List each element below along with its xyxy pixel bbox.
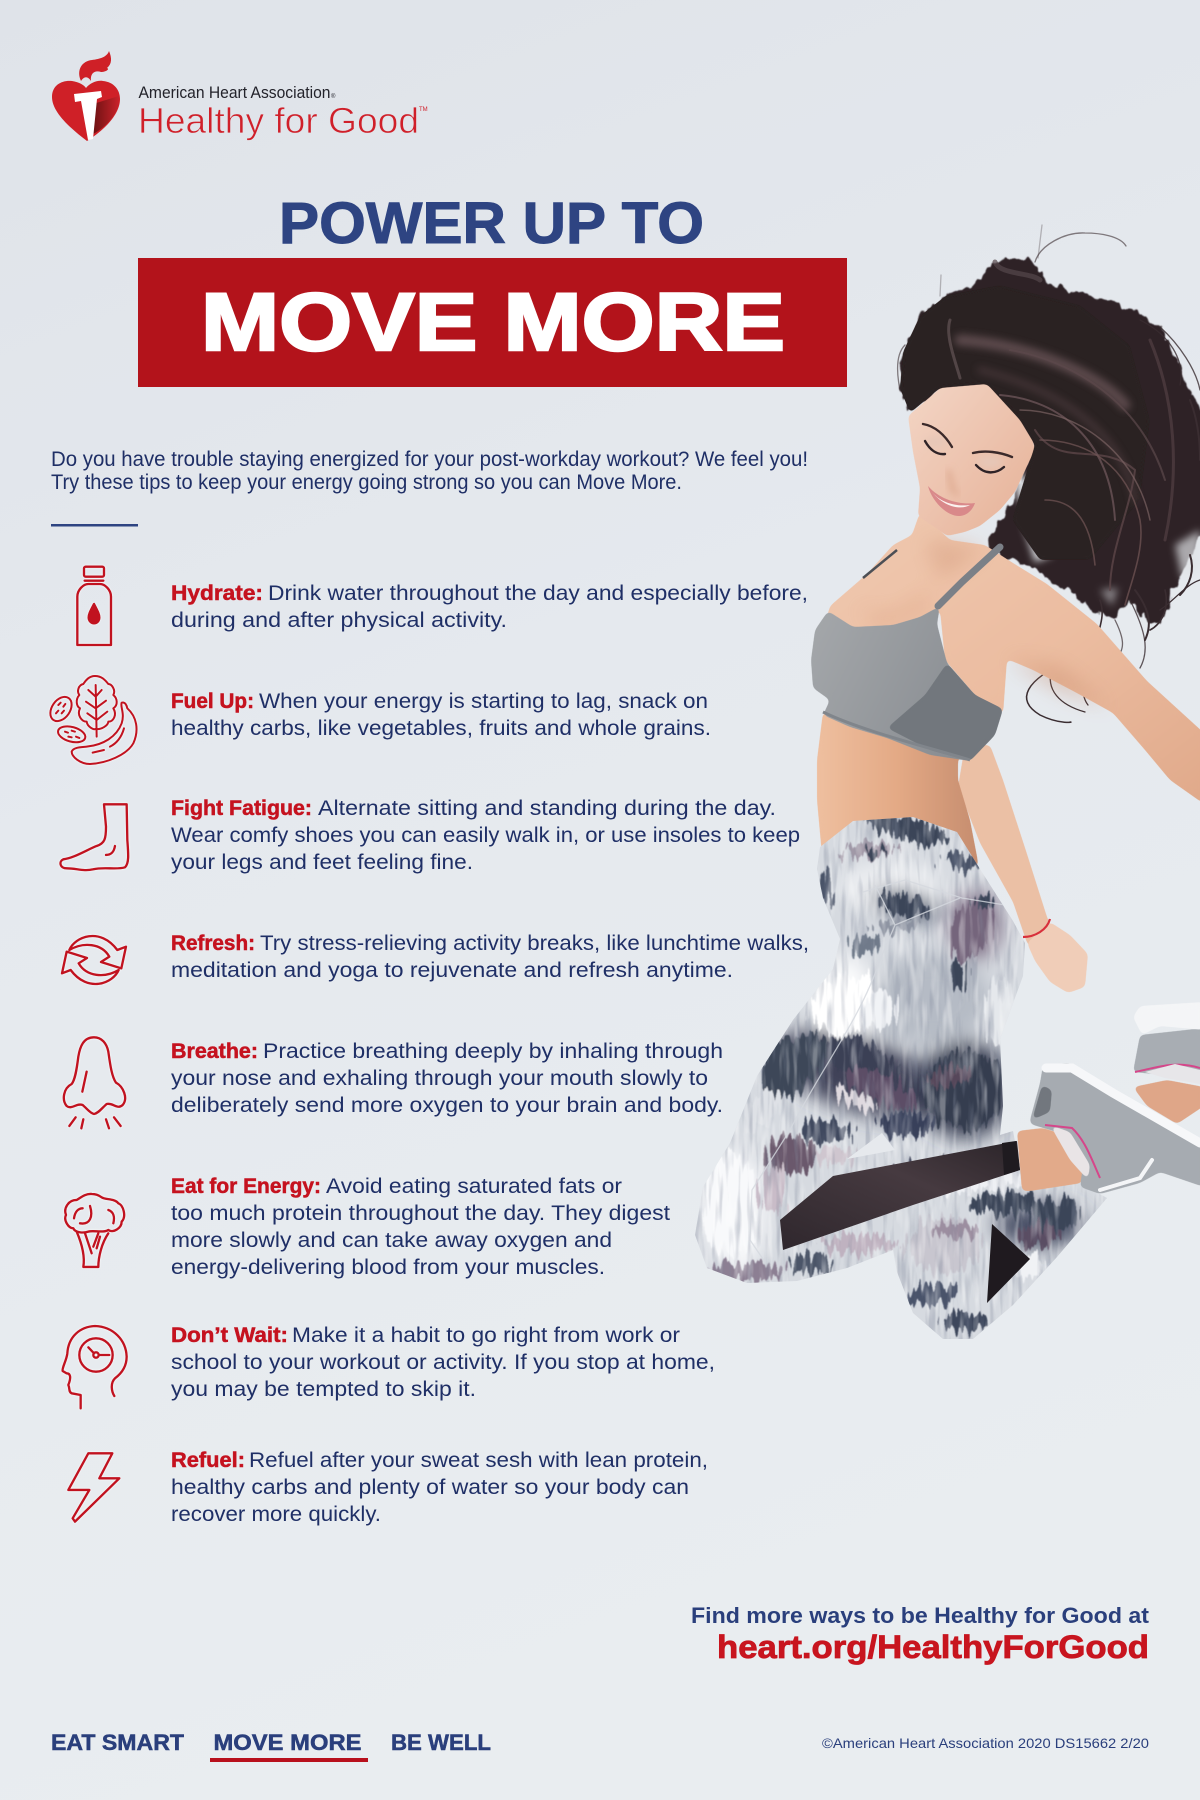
background gap between legs xyxy=(847,1133,895,1159)
tip: Hydrate xyxy=(77,567,808,645)
bra base xyxy=(811,606,1003,761)
text: healthy carbs, like vegetables, fruits and whole grains. xyxy=(171,717,711,740)
tip: Don't Wait xyxy=(63,1324,715,1408)
text: Eat for Energy: xyxy=(171,1175,321,1198)
banner: Move More xyxy=(138,258,847,387)
text: Hydrate: xyxy=(171,582,263,605)
icon: refresh arrows xyxy=(62,936,126,984)
icon: water bottle xyxy=(77,567,111,645)
sports bra xyxy=(811,547,1003,761)
icon: leaf, almonds, banana xyxy=(46,676,137,764)
text xyxy=(171,582,808,632)
face xyxy=(908,380,1035,536)
wrist band xyxy=(1023,919,1050,937)
hair flyaway strands xyxy=(898,225,1200,722)
text: Make it a habit to go right from work or xyxy=(292,1324,680,1347)
text xyxy=(171,932,809,982)
eye shadow xyxy=(925,436,1003,468)
mesh band xyxy=(1002,1141,1020,1175)
icon: broccoli xyxy=(65,1194,124,1267)
text: healthy carbs and plenty of water so your body can xyxy=(171,1476,689,1499)
registered mark: ® xyxy=(331,93,336,100)
hair back xyxy=(900,258,1200,625)
banner: Move More: MOVE MORE xyxy=(201,277,785,368)
right eye xyxy=(976,465,1004,472)
footer navigation xyxy=(51,1730,491,1762)
text: Drink water throughout the day and especially before, xyxy=(268,582,808,605)
left eye xyxy=(925,441,945,454)
back shoe trim xyxy=(1135,1065,1200,1072)
call to action: heart.org/HealthyForGood xyxy=(717,1629,1149,1665)
shoe sole xyxy=(1046,1068,1200,1143)
text: deliberately send more oxygen to your brain and body. xyxy=(171,1094,723,1117)
leggings seam xyxy=(750,880,1005,1262)
tip: Refresh xyxy=(62,932,809,984)
brand name: American Heart Association xyxy=(138,84,330,102)
text xyxy=(171,690,711,740)
text: meditation and yoga to rejuvenate and refresh anytime. xyxy=(171,959,733,982)
face shape xyxy=(908,380,1035,536)
shoe heel xyxy=(1032,1085,1052,1120)
tip: Fight Fatigue xyxy=(60,797,800,874)
right brow xyxy=(973,452,1012,457)
intro text: Try these tips to keep your energy going strong so you can Move More. xyxy=(51,471,682,494)
leggings base xyxy=(695,817,1107,1339)
hair front xyxy=(900,262,1173,605)
text: Practice breathing deeply by inhaling through xyxy=(263,1040,723,1063)
left brow xyxy=(923,424,952,447)
text: Refuel: xyxy=(171,1449,245,1472)
shoe body xyxy=(1030,1063,1200,1194)
icon: head with clock xyxy=(63,1326,127,1408)
footer navigation: EAT SMART xyxy=(51,1730,185,1755)
text: When your energy is starting to lag, snack on xyxy=(259,690,708,713)
text xyxy=(171,1040,723,1117)
hair crown xyxy=(900,285,1150,560)
nose shadow xyxy=(948,470,958,494)
text xyxy=(171,1175,670,1279)
text: too much protein throughout the day. They digest xyxy=(171,1202,670,1225)
icon: nose xyxy=(64,1037,125,1128)
leggings xyxy=(695,817,1107,1339)
shoe collar lining xyxy=(1050,1125,1090,1180)
back shoe lining xyxy=(1145,1064,1200,1084)
tip: Eat for Energy xyxy=(65,1175,670,1279)
text: more slowly and can take away oxygen and xyxy=(171,1229,612,1252)
bra dark panel xyxy=(887,663,1003,761)
front shoe xyxy=(1030,1063,1200,1194)
mesh panel lower xyxy=(987,1224,1030,1303)
text: recover more quickly. xyxy=(171,1503,381,1526)
shoe trim xyxy=(1045,1125,1100,1178)
footer navigation: BE WELL xyxy=(391,1730,491,1755)
back shoe sole xyxy=(1133,1002,1200,1035)
forearm xyxy=(958,745,1050,950)
call to action xyxy=(691,1603,1150,1665)
right strap xyxy=(938,547,1000,606)
back ankle xyxy=(1133,1080,1200,1124)
smile xyxy=(928,486,975,516)
text: energy-delivering blood from your muscles. xyxy=(171,1256,605,1279)
text: Avoid eating saturated fats or xyxy=(326,1175,622,1198)
copyright: ©American Heart Association 2020 DS15662 2/20 xyxy=(822,1735,1149,1751)
text: Breathe: xyxy=(171,1040,258,1063)
shoulders and raised arm xyxy=(826,512,1200,804)
torso xyxy=(817,712,980,872)
tip: Breathe xyxy=(64,1037,723,1128)
left strap xyxy=(863,550,897,578)
hand xyxy=(1027,922,1088,993)
body shadows xyxy=(850,540,1110,708)
title xyxy=(138,191,847,387)
bra band xyxy=(823,712,970,760)
text: Wear comfy shoes you can easily walk in, or use insoles to keep xyxy=(171,824,800,847)
text xyxy=(171,1324,715,1401)
text: Fuel Up: xyxy=(171,690,254,713)
text: school to your workout or activity. If you stop at home, xyxy=(171,1351,715,1374)
text: Alternate sitting and standing during the day. xyxy=(318,797,776,820)
intro text xyxy=(51,448,808,494)
shoe lace xyxy=(1100,1160,1152,1190)
text: your nose and exhaling through your mouth slowly to xyxy=(171,1067,708,1090)
text: you may be tempted to skip it. xyxy=(171,1378,476,1401)
icon: lightning bolt xyxy=(68,1453,119,1522)
text: Fight Fatigue: xyxy=(171,797,312,820)
text: Try stress-relieving activity breaks, like lunchtime walks, xyxy=(260,932,809,955)
back arm and hand xyxy=(958,745,1088,993)
intro text: Do you have trouble staying energized for your post-workday workout? We feel you! xyxy=(51,448,808,471)
text: Don’t Wait: xyxy=(171,1324,288,1347)
text: Refresh: xyxy=(171,932,255,955)
back shoe body xyxy=(1133,1028,1200,1083)
leggings pattern xyxy=(695,817,1102,1339)
photo: woman jumping xyxy=(680,225,1200,1350)
heading: Power up to: POWER UP TO xyxy=(279,191,704,256)
fine streaks xyxy=(695,818,1100,1339)
icon: foot xyxy=(60,804,128,870)
soft tonal underlay xyxy=(703,863,1085,1270)
hair highlights xyxy=(949,262,1173,605)
text xyxy=(171,1449,708,1526)
hair gaps xyxy=(1014,474,1200,606)
text xyxy=(171,797,800,874)
call to action: Find more ways to be Healthy for Good at xyxy=(691,1603,1150,1628)
tip: Fuel Up xyxy=(46,676,711,764)
mesh panel upper xyxy=(780,1141,1020,1250)
footer navigation: MOVE MORE xyxy=(214,1730,362,1755)
back shoe xyxy=(1133,1002,1200,1084)
logo: American Heart Association Healthy for Good xyxy=(52,51,428,141)
text: your legs and feet feeling fine. xyxy=(171,851,473,874)
brand tagline: Healthy for Good xyxy=(138,100,419,141)
fine white streaks xyxy=(720,818,1102,1338)
tip: Refuel xyxy=(68,1449,708,1526)
icon: heart and torch xyxy=(52,51,120,141)
ankle xyxy=(1017,1128,1085,1191)
text: Refuel after your sweat sesh with lean protein, xyxy=(249,1449,708,1472)
trademark: TM xyxy=(419,107,428,113)
text: during and after physical activity. xyxy=(171,609,507,632)
